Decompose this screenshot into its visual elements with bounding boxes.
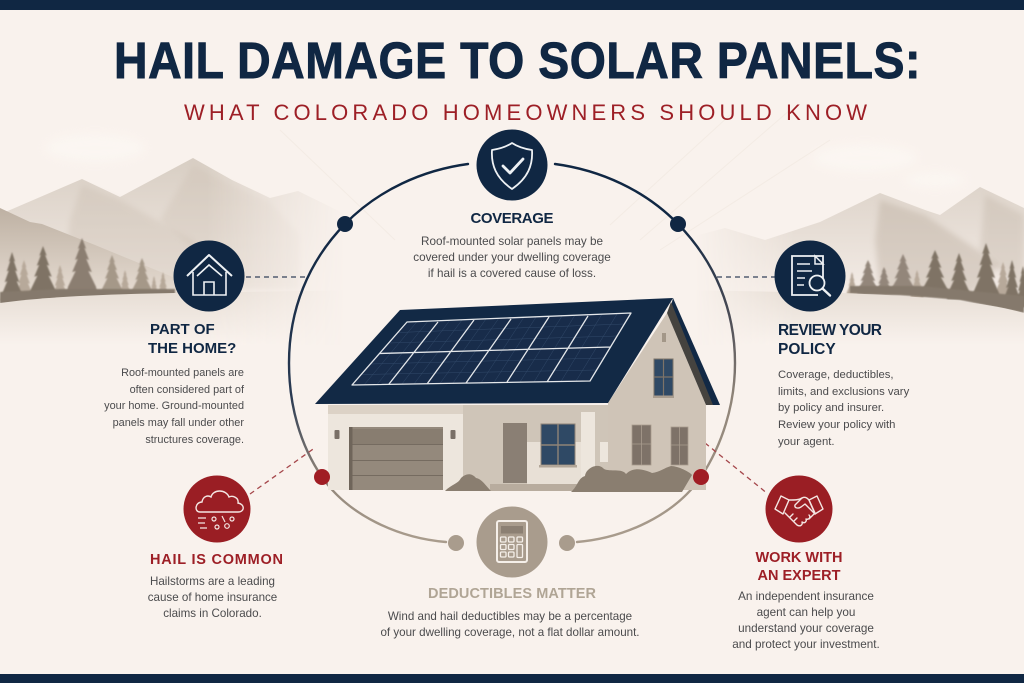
wall lamps <box>334 430 456 439</box>
body text: Roof-mounted solar panels may be <box>421 235 603 248</box>
house illustration with solar panels <box>315 298 720 492</box>
garage door <box>349 427 443 490</box>
main roof <box>315 298 673 404</box>
card: hail is common <box>148 476 283 620</box>
body text: Wind and hail deductibles may be a percentage <box>388 610 632 623</box>
heading: AN EXPERT <box>758 568 841 584</box>
steps <box>490 484 578 491</box>
body text: understand your coverage <box>738 622 874 635</box>
body text: of your dwelling coverage, not a flat dollar amount. <box>380 626 640 639</box>
ring node dots <box>314 216 709 551</box>
body text <box>732 590 880 651</box>
body text <box>413 235 611 280</box>
top band <box>0 0 1024 10</box>
body text: Hailstorms are a leading <box>150 575 275 588</box>
heading <box>778 322 882 358</box>
body text: cause of home insurance <box>148 591 277 604</box>
lower walls <box>328 405 608 490</box>
body text: An independent insurance <box>738 590 874 603</box>
cell grid <box>361 314 624 385</box>
gable roof edge <box>671 298 720 405</box>
heading: PART OF <box>150 321 215 338</box>
body text: your home. Ground-mounted <box>104 400 244 412</box>
card: part of the home <box>104 240 245 446</box>
solar array <box>352 313 631 385</box>
icon: document with magnifier <box>774 240 846 312</box>
icon: calculator <box>476 506 548 578</box>
title: HAIL DAMAGE TO SOLAR PANELS: <box>114 32 921 89</box>
body text: panels may fall under other <box>113 417 244 429</box>
card: work with an expert <box>732 476 880 651</box>
body text: often considered part of <box>130 384 245 396</box>
heading: REVIEW YOUR <box>778 322 882 339</box>
body text: agent can help you <box>757 606 855 619</box>
body text: Coverage, deductibles, <box>778 369 894 381</box>
card: coverage <box>413 130 611 280</box>
panel frames <box>352 313 631 385</box>
body text: by policy and insurer. <box>778 402 884 414</box>
icon: hail cloud <box>184 476 250 542</box>
body text: your agent. <box>778 436 835 448</box>
heading <box>148 321 236 357</box>
gable wall <box>608 313 706 490</box>
illustration: left mountains and forest <box>0 158 310 327</box>
heading: COVERAGE <box>470 210 554 227</box>
body text: covered under your dwelling coverage <box>413 251 611 264</box>
illustration: right mountains and forest <box>728 187 1024 327</box>
gable vent <box>662 333 666 342</box>
bottom band <box>0 674 1024 683</box>
front window <box>539 424 577 468</box>
body text <box>104 367 245 446</box>
icon: house <box>174 240 244 312</box>
icon: handshake <box>766 476 832 542</box>
subtitle: WHAT COLORADO HOMEOWNERS SHOULD KNOW <box>184 100 867 125</box>
icon: shield check <box>476 130 548 200</box>
front door <box>503 423 527 483</box>
heading: DEDUCTIBLES MATTER <box>428 586 597 602</box>
shrubs <box>445 466 692 492</box>
heading: HAIL IS COMMON <box>150 552 283 568</box>
body text: Roof-mounted panels are <box>121 367 244 379</box>
body text: structures coverage. <box>145 434 244 446</box>
heading: POLICY <box>778 341 836 358</box>
dashed connectors <box>246 277 775 494</box>
body text: Review your policy with <box>778 419 895 431</box>
body text: limits, and exclusions vary <box>778 386 910 398</box>
decorative sun rays <box>280 110 830 250</box>
decorative sky clouds <box>45 134 965 188</box>
upper gable window <box>653 359 674 398</box>
body text: claims in Colorado. <box>163 607 262 620</box>
heading <box>756 550 842 584</box>
lower right windows <box>632 425 688 465</box>
heading: WORK WITH <box>756 550 842 566</box>
card: deductibles matter <box>380 506 640 639</box>
body text <box>148 575 277 620</box>
body text: if hail is a covered cause of loss. <box>428 267 596 280</box>
body text <box>778 369 910 448</box>
heading: THE HOME? <box>148 340 236 357</box>
circular connector ring <box>289 164 735 542</box>
body text: and protect your investment. <box>732 638 880 651</box>
card: review your policy <box>774 240 910 448</box>
body text <box>380 610 640 639</box>
